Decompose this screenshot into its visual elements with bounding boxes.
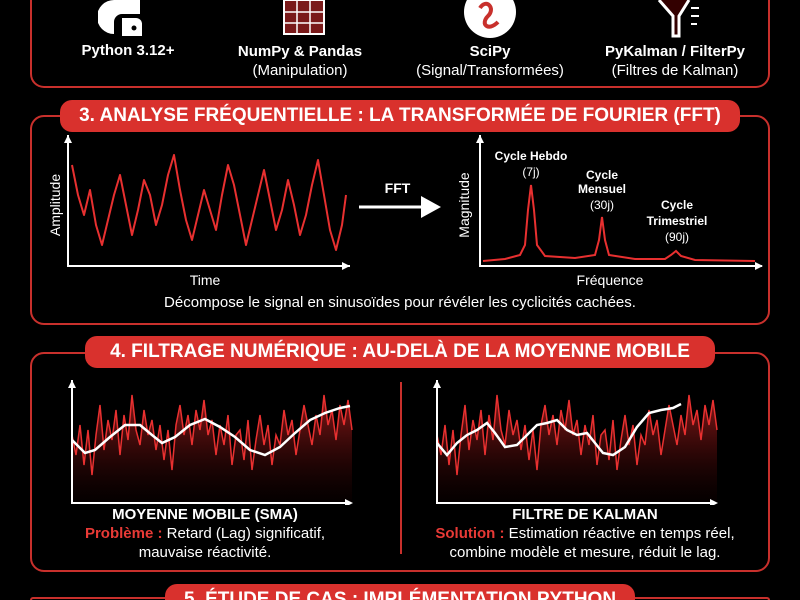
label: scipy: SciPy	[470, 43, 510, 60]
heading: section 4: 4. FILTRAGE NUMÉRIQUE : AU-DELÀ DE LA MOYENNE MOBILE	[110, 341, 690, 362]
heading: section 5	[165, 584, 635, 600]
icon: numpy grid	[283, 0, 325, 35]
panel: tools	[30, 0, 770, 88]
caption: FFT: Décompose le signal en sinusoïdes pour révéler les cyclicités cachées.	[164, 294, 636, 311]
chart: spectrum: (90j)	[665, 230, 689, 244]
chart: Kalman	[433, 380, 718, 505]
panel: FFT	[30, 115, 770, 325]
label: python: Python 3.12+	[82, 42, 174, 59]
chart: spectrum	[456, 135, 763, 288]
chart: spectrum: (7j)	[522, 165, 540, 179]
arrow: FFT	[359, 180, 441, 218]
chart: spectrum: (30j)	[590, 198, 614, 212]
chart: spectrum: Mensuel	[578, 182, 626, 196]
icon: python	[98, 0, 142, 36]
heading: section 3: 3. ANALYSE FRÉQUENTIELLE : LA TRANSFORMÉE DE FOURIER (FFT)	[79, 105, 721, 126]
heading: section 4	[85, 336, 715, 368]
chart: SMA	[68, 380, 353, 505]
text: SMA: Problème : Retard (Lag) significatif,	[85, 525, 325, 542]
chart: spectrum: Fréquence	[577, 272, 644, 288]
label: scipy: (Signal/Transformées)	[416, 62, 564, 79]
text: Kalman: Solution : Estimation réactive en temps réel,	[435, 525, 735, 542]
panel: filtering	[30, 352, 770, 572]
chart: spectrum: Trimestriel	[647, 214, 707, 228]
chart: spectrum: Cycle Hebdo	[495, 149, 567, 163]
label: numpy: (Manipulation)	[252, 62, 348, 79]
icon: scipy	[464, 0, 516, 38]
label: numpy	[238, 43, 362, 79]
heading: section 3	[60, 100, 740, 132]
chart: time signal	[47, 135, 350, 288]
divider	[400, 382, 402, 554]
label: pykalman	[605, 43, 745, 79]
label: pykalman: PyKalman / FilterPy	[605, 43, 745, 60]
chart: time signal: Amplitude	[47, 174, 63, 236]
text: Kalman	[435, 506, 735, 561]
text: SMA: mauvaise réactivité.	[139, 544, 271, 561]
text: Kalman: FILTRE DE KALMAN	[512, 506, 658, 523]
chart: spectrum: Magnitude	[456, 172, 472, 238]
text: SMA	[85, 506, 325, 561]
chart: time signal: Time	[190, 272, 221, 288]
chart: spectrum: Cycle	[661, 198, 693, 212]
label: scipy	[416, 43, 564, 79]
label: numpy: NumPy & Pandas	[238, 43, 362, 60]
panel: case study	[30, 597, 770, 600]
text: Kalman: combine modèle et mesure, réduit le lag.	[450, 544, 720, 561]
icon: filter	[658, 0, 699, 38]
arrow: FFT: FFT	[385, 180, 410, 196]
label: pykalman: (Filtres de Kalman)	[612, 62, 738, 79]
text: SMA: MOYENNE MOBILE (SMA)	[112, 506, 298, 523]
chart: spectrum: Cycle	[586, 168, 618, 182]
